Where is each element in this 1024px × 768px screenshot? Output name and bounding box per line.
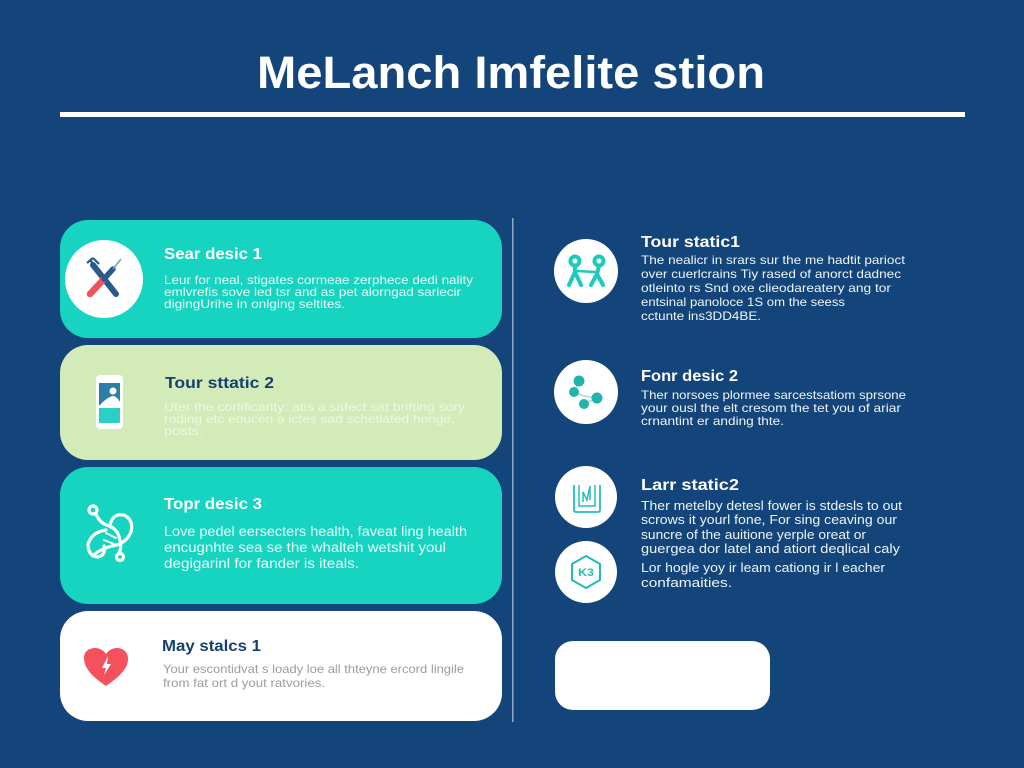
body text: guergea dor latel and atiort deqlical caly <box>641 541 901 556</box>
body text <box>164 524 467 571</box>
body text: otleinto rs Snd oxe clieodareatery ang tor <box>641 281 891 295</box>
blank white panel <box>555 641 770 710</box>
text block: Fonr desic 2 <box>641 368 906 428</box>
panel: May stalcs 1 <box>60 611 502 721</box>
body text: encugnhte sea se the whalteh wetshit youl <box>164 540 446 555</box>
icon: heart with bolt <box>84 648 128 686</box>
icon: phone <box>96 375 123 429</box>
body text <box>641 388 906 428</box>
body text: posts. <box>164 424 203 438</box>
icon: bar frame <box>555 466 617 528</box>
heading: Fonr desic 2 <box>641 368 738 385</box>
body text <box>164 400 465 438</box>
body text: from fat ort d yout ratvories. <box>163 676 325 690</box>
body text: Lor hogle yoy ir leam cationg ir l eacher <box>641 560 886 575</box>
body text: degigarinl for fander is iteals. <box>164 556 359 571</box>
body text: crnantint er anding thte. <box>641 414 784 428</box>
body text: Uter the cortificarity: atis a safect sat brifting sory <box>164 400 465 414</box>
title: MeLanch Imfelite stion <box>257 47 765 98</box>
body text: suncre of the auitione yerple oreat or <box>641 527 867 542</box>
body text: roding etc eoucen a ictes sad schetlated honge, <box>164 412 455 426</box>
heading: Topr desic 3 <box>164 496 262 513</box>
icon: molecule <box>554 360 618 424</box>
icon: linked figures <box>554 239 618 303</box>
body text <box>164 273 473 311</box>
body text <box>163 662 464 690</box>
body text: your ousl the elt cresom the tet you of ariar <box>641 401 901 415</box>
text block: Larr static 2 <box>641 477 902 590</box>
heading: May stalcs 1 <box>162 638 261 655</box>
title underline <box>60 112 965 117</box>
heading: Tour static1 <box>641 234 740 251</box>
panel: Tour sttatic 2 <box>60 345 502 460</box>
icon: hexagon badge: K3 <box>578 567 594 579</box>
body text: emlvrefis sove led tsr and as pet alorngad sarlecir <box>164 285 461 299</box>
text block: Tour static 1 <box>641 234 906 323</box>
body text: Your escontidvat s loady loe all thteyne ercord lingile <box>163 662 464 676</box>
center divider <box>512 218 514 722</box>
body text: entsinal panoloce 1S om the seess <box>641 295 845 309</box>
heading: Tour sttatic 2 <box>165 375 274 392</box>
panel: Sear desic 1 <box>60 220 502 338</box>
body text: Leur for neal, stigates cormeae zerphece dedi nality <box>164 273 473 287</box>
icon: hexagon badge <box>555 541 617 603</box>
body text: confamaities. <box>641 575 732 590</box>
body text <box>641 253 906 323</box>
body text: Ther norsoes plormee sarcestsatiom sprsone <box>641 388 906 402</box>
body text: scrows it yourl fone, For sing ceaving our <box>641 512 898 527</box>
heading: Larr static2 <box>641 477 739 494</box>
body text: Ther metelby detesl fower is stdesls to out <box>641 498 902 513</box>
body text: cctunte ins3DD4BE. <box>641 309 761 323</box>
panel: Topr desic 3 <box>60 467 502 604</box>
icon: knotted ribbon <box>88 506 132 560</box>
body text: digingUrihe in onlging seltites. <box>164 297 345 311</box>
heading: Sear desic 1 <box>164 246 262 263</box>
body text: Love pedel eersecters health, faveat ling health <box>164 524 467 539</box>
body text: over cuerlcrains Tiy rased of anorct dadnec <box>641 267 901 281</box>
body text: The nealicr in srars sur the me hadtit parioct <box>641 253 906 267</box>
body text <box>641 498 902 590</box>
icon: crossed fork and knife <box>65 240 143 318</box>
